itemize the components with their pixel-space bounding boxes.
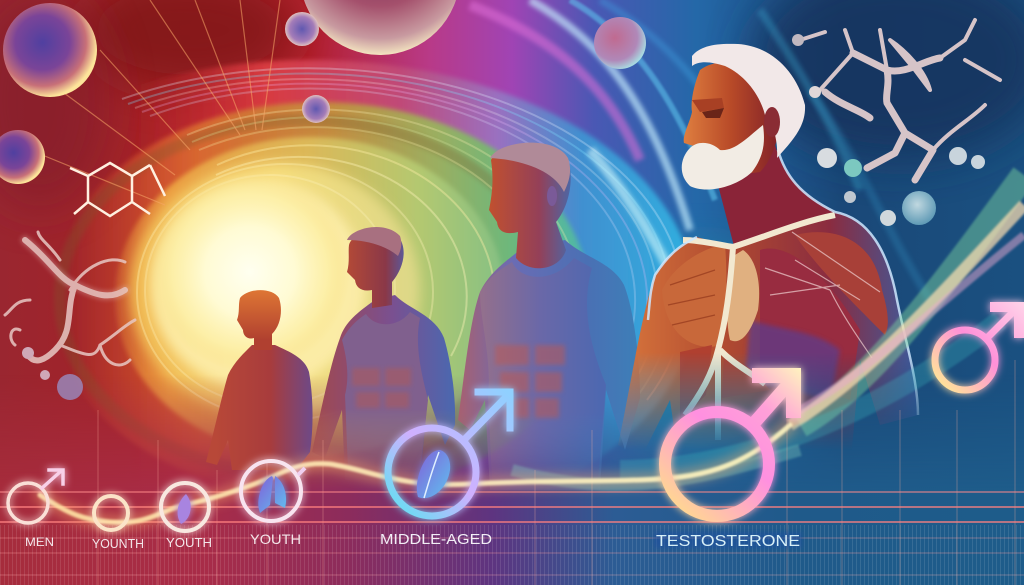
male symbol: ring two — [94, 496, 128, 530]
male symbol: right — [935, 302, 1024, 390]
dendritic molecule right — [792, 20, 1000, 226]
label: middle-aged: MIDDLE-AGED — [380, 531, 492, 548]
neck — [718, 145, 835, 250]
sphere: left — [0, 130, 45, 184]
brow — [692, 98, 724, 112]
fan-out ribbon rainbow — [512, 175, 1024, 485]
eye — [702, 108, 724, 118]
sphere: top left — [3, 3, 97, 97]
torso and arms — [618, 212, 916, 445]
testosterone wave ribbon — [40, 425, 790, 522]
sphere: right top — [594, 17, 646, 69]
figure 3: young man — [458, 143, 640, 490]
male symbol: testosterone large — [665, 368, 801, 516]
muscle fibres — [668, 232, 880, 358]
figure 1: young boy silhouette — [206, 290, 313, 470]
label: youth two: YOUTH — [250, 531, 301, 547]
dendritic molecule left — [5, 232, 135, 400]
sphere: small middle — [302, 95, 330, 123]
deltoid muscle — [795, 232, 888, 335]
clavicle and sternum — [683, 215, 835, 440]
label: testosterone: TESTOSTERONE — [656, 533, 800, 550]
shoulder glow outline — [648, 150, 918, 415]
pale chest centre — [727, 250, 759, 341]
tunnel ring strokes — [122, 68, 683, 420]
fine chart stripes — [0, 525, 1024, 585]
abs — [680, 345, 770, 420]
sphere: top centre — [300, 0, 460, 55]
label: youth one: YOUTH — [166, 535, 212, 550]
label: younth: YOUNTH — [92, 537, 144, 551]
purple lower chest — [745, 320, 840, 400]
male symbol: ring four with organ — [241, 461, 305, 521]
light rays upper left — [30, 0, 280, 205]
streaks upper right — [470, 0, 930, 300]
hexagon molecule — [70, 163, 165, 216]
ear — [764, 107, 780, 137]
left chest muscle — [673, 247, 726, 346]
figure 4: old man with anatomy — [618, 44, 918, 470]
label: men: MEN — [25, 535, 54, 549]
rainbow energy domes — [0, 60, 695, 540]
beard — [682, 125, 764, 190]
figure 2: teenager — [312, 227, 455, 480]
white hair — [692, 44, 805, 158]
central light glow — [150, 172, 350, 372]
bottom colour wash — [0, 375, 1024, 585]
sphere: small top — [285, 12, 319, 46]
right chest muscle — [760, 248, 860, 400]
face — [684, 62, 779, 180]
male symbol: ring three with organ — [161, 483, 209, 531]
grid lines — [0, 360, 1024, 585]
male symbol: middle-aged — [388, 392, 510, 516]
male symbol: men — [8, 470, 63, 523]
